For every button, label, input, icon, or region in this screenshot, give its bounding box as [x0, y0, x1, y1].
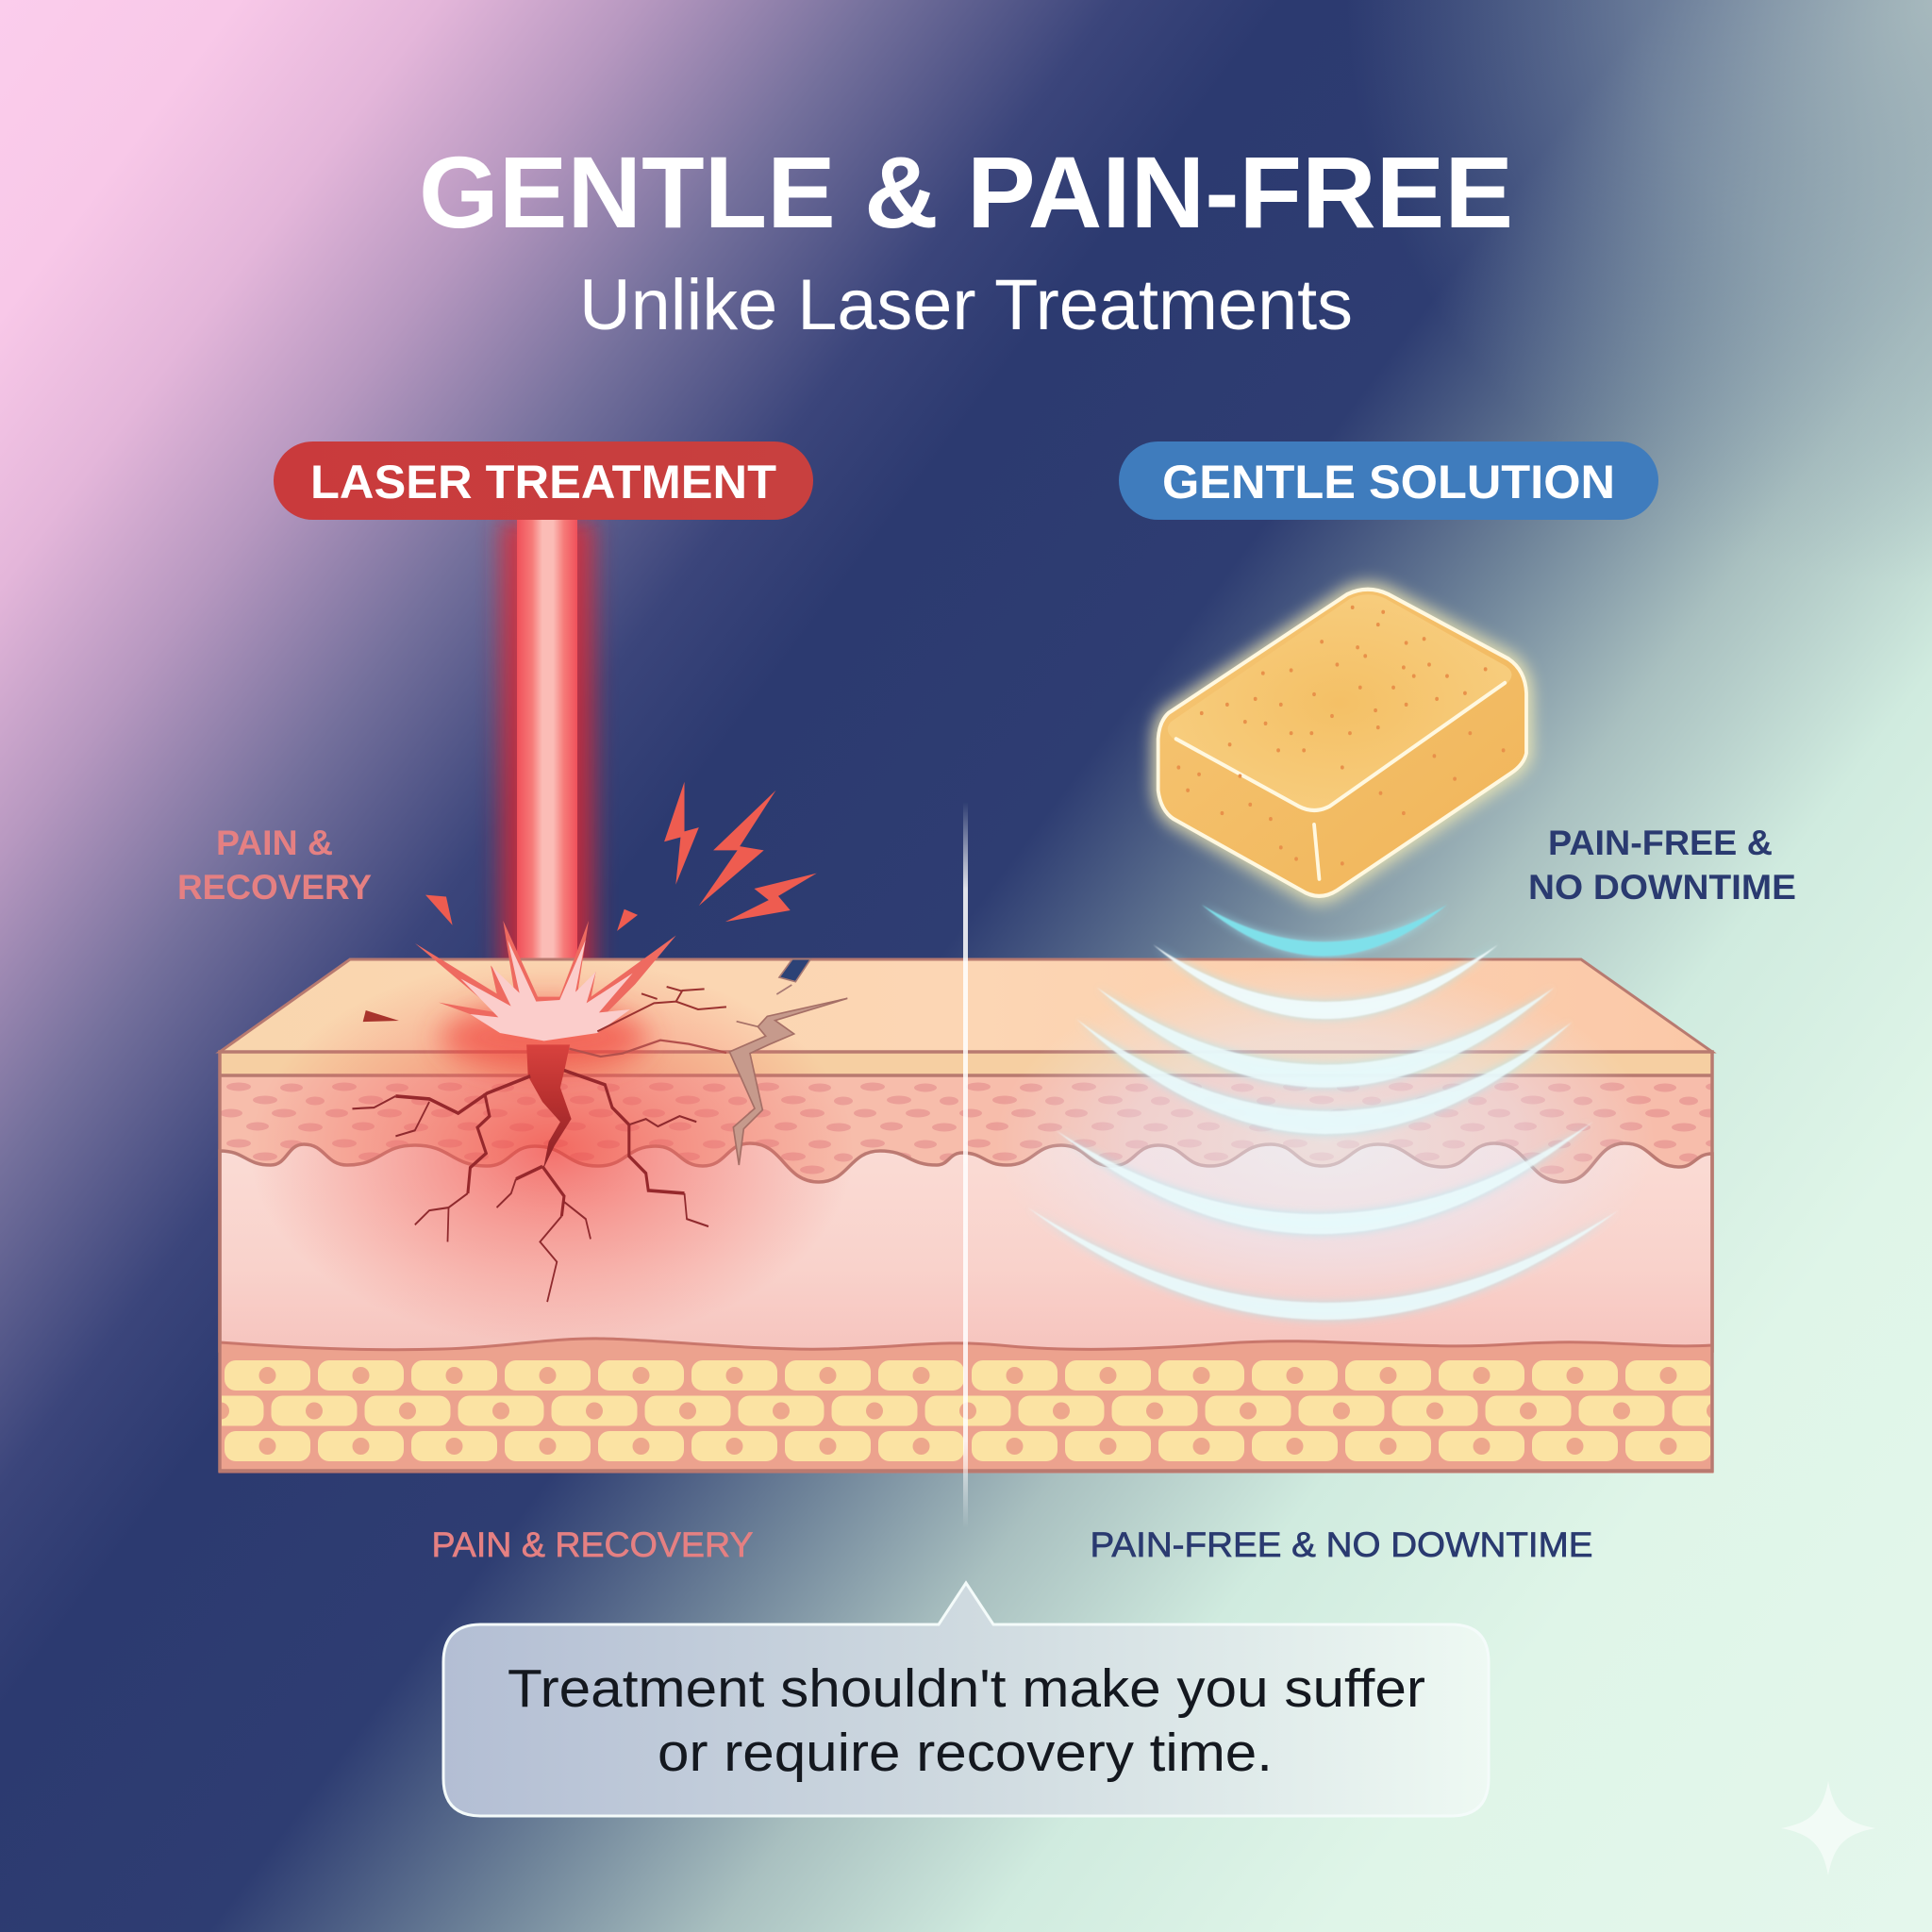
callout — [443, 1583, 1489, 1816]
epidermis layer — [220, 1075, 1712, 1187]
fat layer base — [220, 1339, 1712, 1472]
dark skin shard — [363, 1010, 399, 1022]
laser beam — [500, 520, 594, 1020]
gentle solution pill: GENTLE SOLUTION — [1162, 456, 1615, 508]
wave glow — [1027, 905, 1619, 1320]
label: pain and recovery bottom: PAIN & RECOVERY — [432, 1525, 753, 1564]
skin cross-section diagram — [220, 959, 1712, 1472]
background top-right lightening — [1321, 0, 1932, 604]
edge notch — [779, 959, 810, 982]
flying shard left — [425, 895, 453, 925]
callout: Treatment shouldn't make you suffer — [508, 1658, 1425, 1719]
wave 2 — [1097, 988, 1555, 1088]
epidermis cells — [220, 1081, 1712, 1181]
label: pain and recovery left: RECOVERY — [177, 868, 372, 907]
laser treatment pill: LASER TREATMENT — [310, 456, 776, 508]
title: GENTLE & PAIN-FREE — [419, 135, 1513, 249]
callout: or require recovery time. — [658, 1723, 1273, 1783]
wave 4 — [1056, 1122, 1592, 1234]
pain bolt 2 — [699, 791, 775, 906]
wave 3 — [1076, 1019, 1573, 1134]
deep grey crack — [729, 998, 847, 1165]
subtitle: Unlike Laser Treatments — [579, 265, 1353, 345]
wave 1 — [1153, 944, 1498, 1019]
label: pain-free bottom: PAIN-FREE & NO DOWNTIME — [1091, 1525, 1592, 1564]
label: pain-free right: PAIN-FREE & — [1548, 824, 1773, 862]
label: pain and recovery left — [177, 824, 372, 907]
grey surface crack and notch — [729, 959, 847, 1165]
burst core — [460, 941, 633, 1041]
skin strip — [220, 1052, 1712, 1075]
surface crack upper — [597, 987, 726, 1031]
wave 5 — [1027, 1208, 1619, 1320]
label: pain-free right — [1528, 824, 1796, 907]
laser impact burst — [415, 921, 726, 1073]
surface crack lower — [569, 1041, 726, 1057]
sponge body — [1158, 590, 1526, 896]
main cracks — [395, 1071, 685, 1216]
gentle solution pill — [1119, 441, 1658, 520]
crack network — [352, 782, 817, 1302]
label: pain and recovery left: PAIN & — [216, 824, 333, 862]
center divider line — [963, 802, 968, 1528]
pain bolt 3 — [725, 874, 817, 922]
laser treatment pill — [274, 441, 813, 520]
laser damage glow in skin — [250, 958, 854, 1344]
wave 0 cyan — [1202, 905, 1447, 956]
sponge top face — [1168, 594, 1511, 811]
burst spikes — [415, 921, 676, 1033]
fat cells — [222, 1357, 1710, 1466]
notch tick — [776, 985, 791, 994]
sponge speckles — [1176, 606, 1505, 865]
dermis layer — [220, 1143, 1712, 1351]
flying shard right — [617, 909, 638, 931]
thin cracks — [352, 1096, 708, 1302]
skin top surface — [220, 959, 1712, 1052]
central crack — [526, 1044, 572, 1169]
impact glow — [441, 1003, 648, 1073]
pain bolt 1 — [664, 782, 699, 885]
skin outline — [220, 1052, 1712, 1471]
gentle sponge bar — [1158, 590, 1526, 896]
sponge edges — [1176, 683, 1505, 879]
icon: sparkle watermark — [1781, 1781, 1875, 1875]
cool glow under waves — [995, 962, 1656, 1321]
label: pain-free right: NO DOWNTIME — [1528, 868, 1796, 907]
gentle waves — [1027, 905, 1619, 1320]
sponge glow — [1158, 590, 1526, 896]
